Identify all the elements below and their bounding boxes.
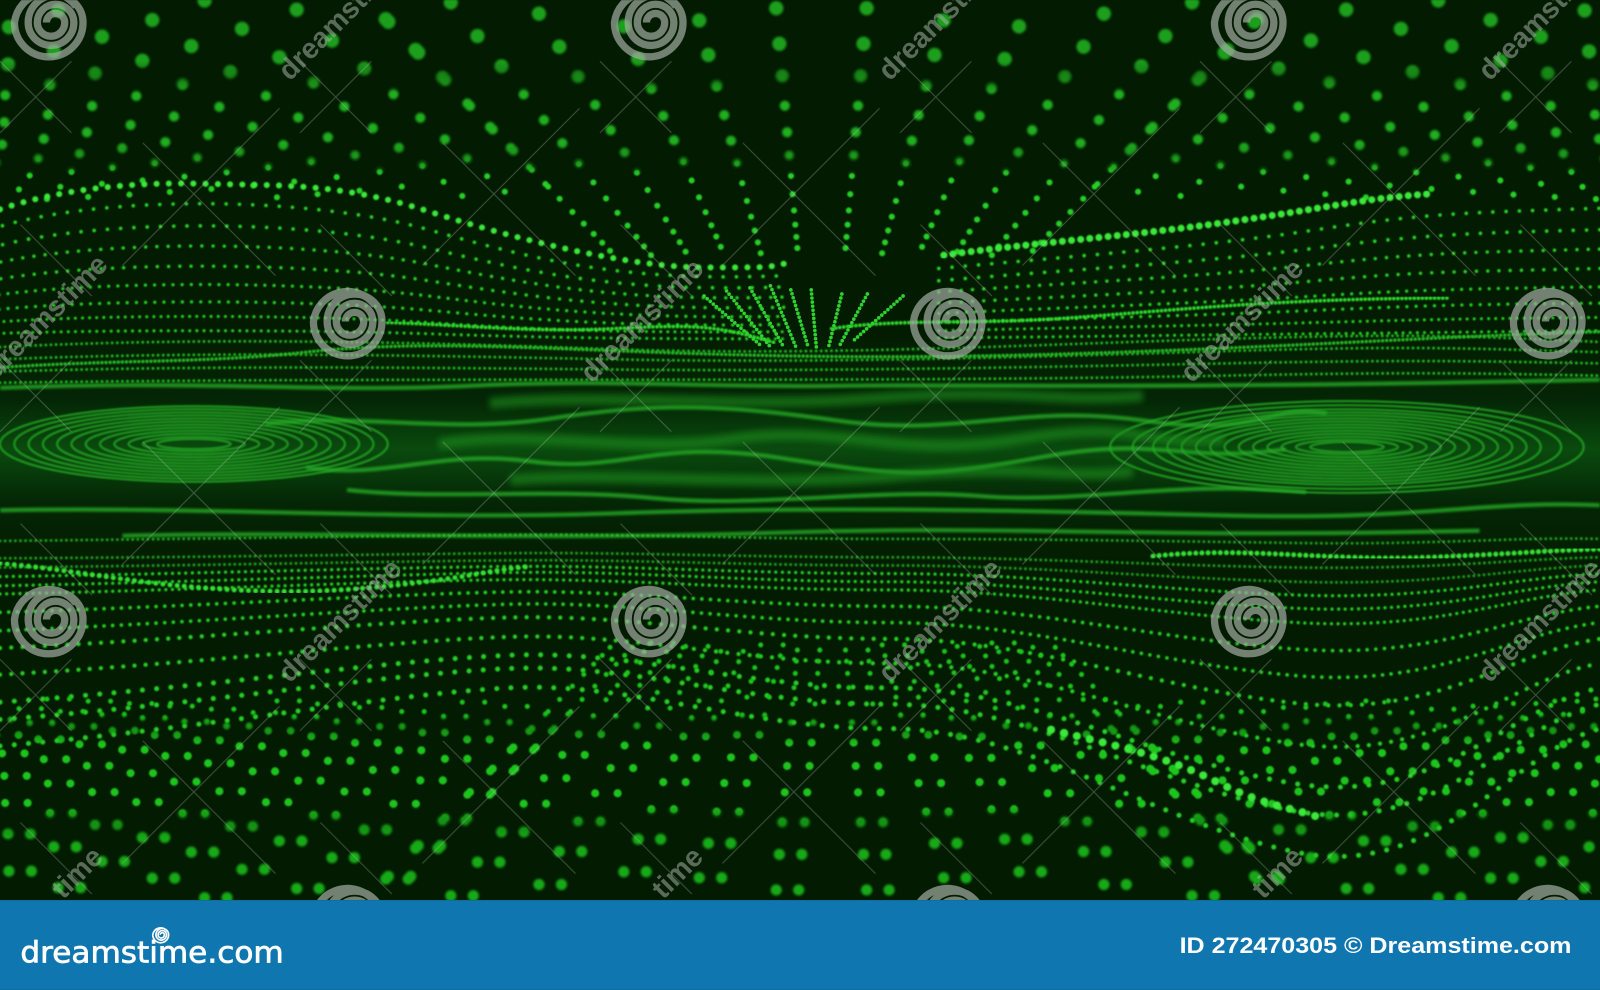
upper dotted hump field	[0, 204, 1600, 383]
ripple rings	[0, 401, 1584, 493]
watermark text: time	[646, 841, 710, 905]
watermark text: dreamstime	[1174, 253, 1310, 389]
watermark text: time	[46, 841, 110, 905]
bright lower ridge lines	[0, 549, 1600, 816]
watermark text: dreamstime	[872, 553, 1008, 689]
central glow band	[0, 327, 1600, 572]
upper radial dot fan	[0, 0, 1600, 255]
footer bar	[0, 900, 1600, 990]
bright upper ridge lines	[0, 183, 1600, 367]
watermark text: time	[1246, 841, 1310, 905]
lower dotted field	[0, 535, 1600, 857]
watermark text: dreamstime	[574, 253, 710, 389]
lower radial dot fan	[0, 643, 1600, 898]
central soft glow	[439, 394, 1224, 480]
footer image id: ID 272470305 © Dreamstime.com	[1180, 933, 1571, 958]
central wave strands	[0, 380, 1600, 536]
footer logo spiral icon	[153, 928, 169, 943]
footer logo text: dreamstime.com	[20, 935, 284, 969]
watermark text: dreamstime	[272, 553, 408, 689]
